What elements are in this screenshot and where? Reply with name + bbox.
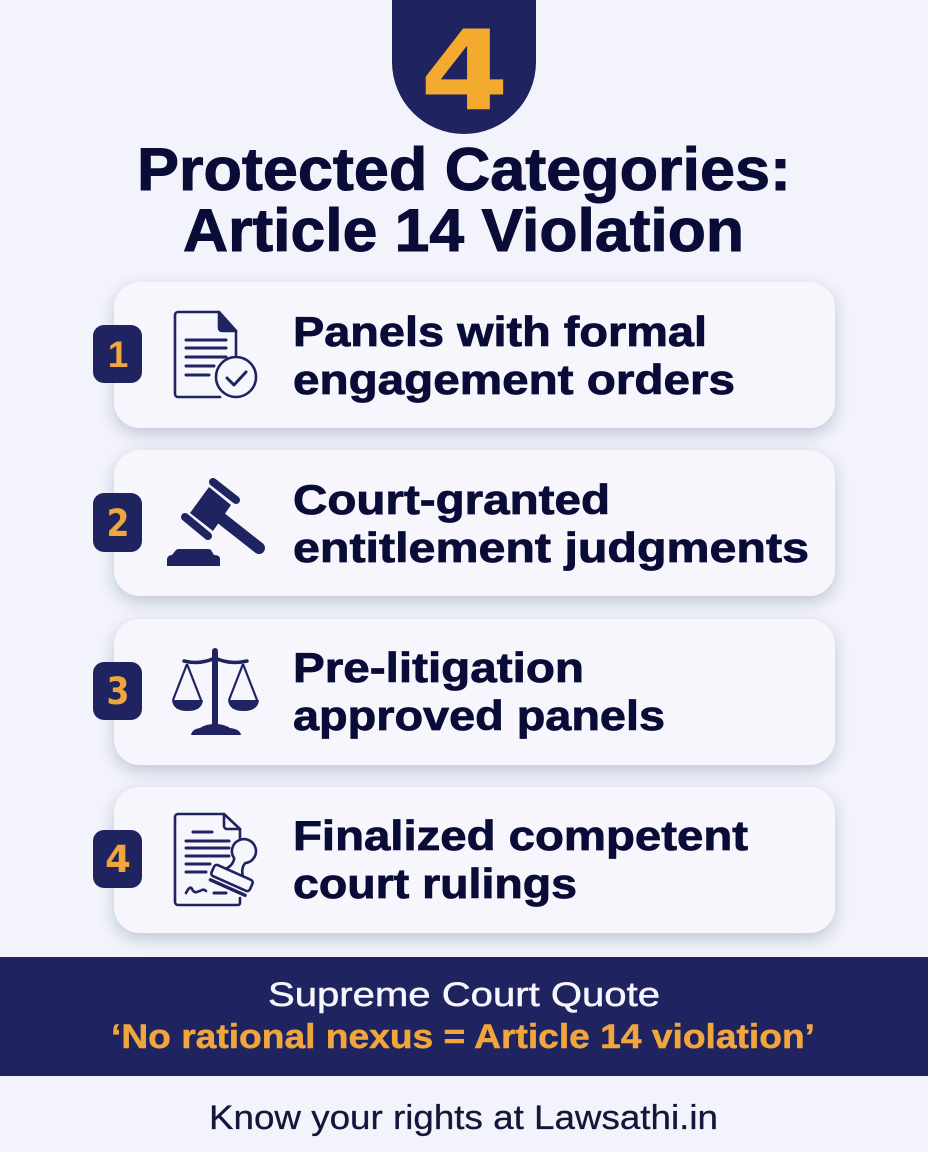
badge 2: [93, 493, 142, 552]
quote banner: ‘No rational nexus = Article 14 violation’: [111, 1018, 815, 1056]
item 1 text: engagement orders: [293, 356, 735, 403]
badge 4: 4: [105, 838, 131, 881]
item 4 text: court rulings: [293, 860, 577, 907]
badge 3: [93, 662, 142, 720]
item 1 text: [293, 308, 735, 403]
badge 3: 3: [106, 670, 130, 713]
quote banner: Supreme Court Quote: [268, 976, 660, 1014]
item 4 text: [293, 812, 748, 907]
panel: item 1: [93, 282, 835, 428]
item 4 text: Finalized competent: [293, 812, 748, 859]
title: Protected Categories:: [137, 136, 791, 203]
item 2 text: [293, 476, 809, 571]
quote banner: [0, 957, 928, 1076]
panel: item 4: [93, 787, 835, 933]
item 1 text: Panels with formal: [293, 308, 707, 355]
item 3 text: Pre-litigation: [293, 644, 584, 691]
icon: document with stamp: [175, 814, 268, 905]
icon: document with check: [175, 312, 256, 397]
icon: scales of justice: [172, 648, 259, 735]
item 3 text: approved panels: [293, 692, 665, 739]
footer text: Know your rights at Lawsathi.in: [209, 1099, 718, 1137]
item 2 text: Court-granted: [293, 476, 610, 523]
title: [137, 136, 791, 264]
top tab with number 4: 4: [420, 7, 509, 136]
item 2 text: entitlement judgments: [293, 524, 809, 571]
badge 4: [93, 830, 142, 888]
badge 2: 2: [106, 502, 130, 545]
badge 1: 1: [108, 334, 128, 375]
item 3 text: [293, 644, 665, 739]
panel: item 3: [93, 619, 835, 765]
panel: item 2: [93, 450, 835, 596]
icon: gavel: [167, 482, 259, 566]
top tab with number 4: [392, 0, 536, 136]
title: Article 14 Violation: [183, 197, 744, 264]
badge 1: [93, 325, 142, 383]
